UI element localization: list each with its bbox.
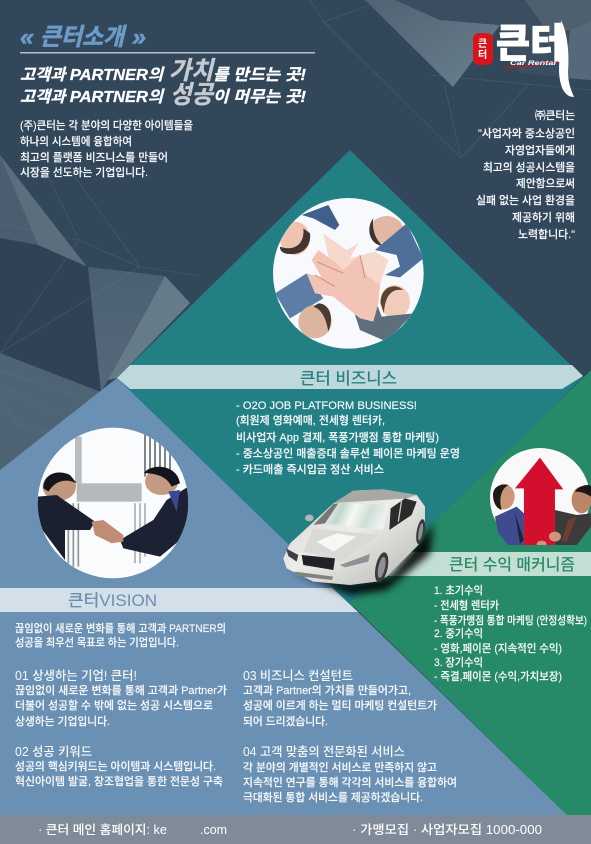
item 01: 상생하는 기업입니다. xyxy=(15,715,110,728)
item 01: 더불어 성공할 수 밖에 없는 성공 시스템으로 xyxy=(15,698,213,712)
photo: team hands circle xyxy=(273,198,424,349)
item 02 xyxy=(15,745,223,788)
item 01 xyxy=(15,669,227,728)
item 03: 성공에 이르게 하는 멀티 마케팅 컨설턴트가 xyxy=(243,698,437,712)
revenue text: 2. 중기수익 xyxy=(434,627,483,640)
item 03 xyxy=(243,669,437,728)
blue vision panel xyxy=(0,378,567,815)
vision intro text: 성공을 최우선 목표로 하는 기업입니다. xyxy=(15,635,179,649)
footer band xyxy=(0,815,591,844)
logo xyxy=(473,20,574,97)
intro text: 하나의 시스템에 융합하여 xyxy=(20,134,132,148)
footer text: homepage: · 큰터 메인 홈페이지: ke xyxy=(38,822,167,837)
bar: vision heading xyxy=(0,588,358,612)
item 02: 02 성공 키워드 xyxy=(15,745,92,759)
logo seal: 터 xyxy=(478,49,487,61)
background polygon facets xyxy=(0,0,591,470)
footer text: recruiting: · 가맹모집 · 사업자모집 1000-000 xyxy=(352,823,542,837)
heading: company intro: 큰터소개 xyxy=(40,24,128,51)
right side statement: 제안함으로써 xyxy=(516,176,575,190)
right side statement: 노력합니다." xyxy=(518,227,575,241)
business text: 비사업자 App 결제, 폭풍가맹점 통합 마케팅) xyxy=(236,430,439,444)
revenue text: - 영화,페이몬 (지속적인 수익) xyxy=(434,642,562,655)
item 01: 끊임없이 새로운 변화를 통해 고객과 Partner가 xyxy=(15,684,227,697)
right side statement: 제공하기 위해 xyxy=(512,211,575,224)
photo: men with red arrow circle xyxy=(490,448,591,548)
item 04: 지속적인 연구를 통해 각각의 서비스를 융합하여 xyxy=(243,775,457,789)
item 04: 04 고객 맞춤의 전문화된 서비스 xyxy=(243,745,405,759)
heading: company intro xyxy=(20,24,315,54)
right side statement: 실패 없는 사업 환경을 xyxy=(476,194,575,207)
item 04 xyxy=(243,745,457,804)
bar: revenue heading: 큰터 수익 매커니즘 xyxy=(449,556,575,574)
item 02: 혁신아이템 발굴, 창조협업을 통한 전문성 구축 xyxy=(15,774,223,788)
item 03: 03 비즈니스 컨설턴트 xyxy=(243,669,353,683)
vision intro text xyxy=(15,622,226,649)
business text: - 카드매출 즉시입금 정산 서비스 xyxy=(236,463,384,476)
footer text: homepage xyxy=(38,822,227,837)
green revenue panel xyxy=(350,370,591,815)
right side statement xyxy=(476,108,575,241)
business text: - 중소상공인 매출증대 솔루션 페이몬 마케팅 운영 xyxy=(236,446,460,460)
logo seal: 큰 xyxy=(478,38,487,50)
revenue text: 1. 초기수익 xyxy=(434,584,483,597)
photo: handshake circle xyxy=(37,428,188,578)
intro text xyxy=(20,119,193,179)
slogan: 이 머무는 곳! xyxy=(213,88,307,106)
slogan: 가치 xyxy=(169,57,216,85)
item 04: 각 분야의 개별적인 서비스로 만족하지 않고 xyxy=(243,760,437,774)
revenue text: 3. 장기수익 xyxy=(434,656,483,669)
slogan: 고객과 PARTNER의 xyxy=(20,66,165,84)
teal business panel xyxy=(117,150,583,608)
vision intro text: 끊임없이 새로운 변화를 통해 고객과 PARTNER의 xyxy=(15,622,226,635)
logo wordmark: 큰터 xyxy=(496,22,564,66)
right side statement: 최고의 성공시스템을 xyxy=(483,160,575,174)
slogan: 고객과 PARTNER의 xyxy=(20,88,165,106)
bar: revenue heading xyxy=(385,552,591,576)
footer text: homepage: .com xyxy=(200,823,227,837)
slogan: 를 만드는 곳! xyxy=(213,66,307,84)
heading: company intro: » xyxy=(132,24,146,51)
item 01: 01 상생하는 기업! 큰터! xyxy=(15,669,137,683)
item 02: 성공의 핵심키워드는 아이템과 시스템입니다. xyxy=(15,760,216,773)
revenue text: - 즉결,페이몬 (수익,가치보장) xyxy=(434,670,562,683)
business text: (회원제 영화예매, 전세형 렌터카, xyxy=(236,413,385,427)
revenue text xyxy=(434,584,587,683)
right side statement: ㈜큰터는 xyxy=(535,108,575,122)
illustration: silver car xyxy=(283,489,433,595)
logo seal xyxy=(473,33,493,65)
logo wordmark xyxy=(496,20,574,97)
bar: business heading: 큰터 비즈니스 xyxy=(300,369,397,388)
revenue text: - 전세형 렌터카 xyxy=(434,598,499,612)
intro text: 최고의 플랫폼 비즈니스를 만들어 xyxy=(20,150,168,164)
slogan: 성공 xyxy=(170,81,215,109)
bar: business heading xyxy=(117,365,583,389)
item 03: 되어 드리겠습니다. xyxy=(243,715,328,728)
business text: - O2O JOB PLATFORM BUSINESS! xyxy=(236,400,417,412)
right side statement: 자영업자들에게 xyxy=(505,143,575,157)
logo wordmark: Car Rental xyxy=(510,61,556,67)
right side statement: "사업자와 중소상공인 xyxy=(478,127,575,140)
item 04: 극대화된 통합 서비스를 제공하겠습니다. xyxy=(243,790,423,804)
item 03: 고객과 Partner의 가치를 만들어가고, xyxy=(243,684,411,697)
intro text: (주)큰터는 각 분야의 다양한 아이템들을 xyxy=(20,119,193,132)
heading: company intro: « xyxy=(20,24,34,51)
bar: vision heading: 큰터VISION xyxy=(68,591,157,610)
business text xyxy=(236,400,460,476)
slogan xyxy=(20,57,307,109)
intro text: 시장을 선도하는 기업입니다. xyxy=(20,166,148,179)
